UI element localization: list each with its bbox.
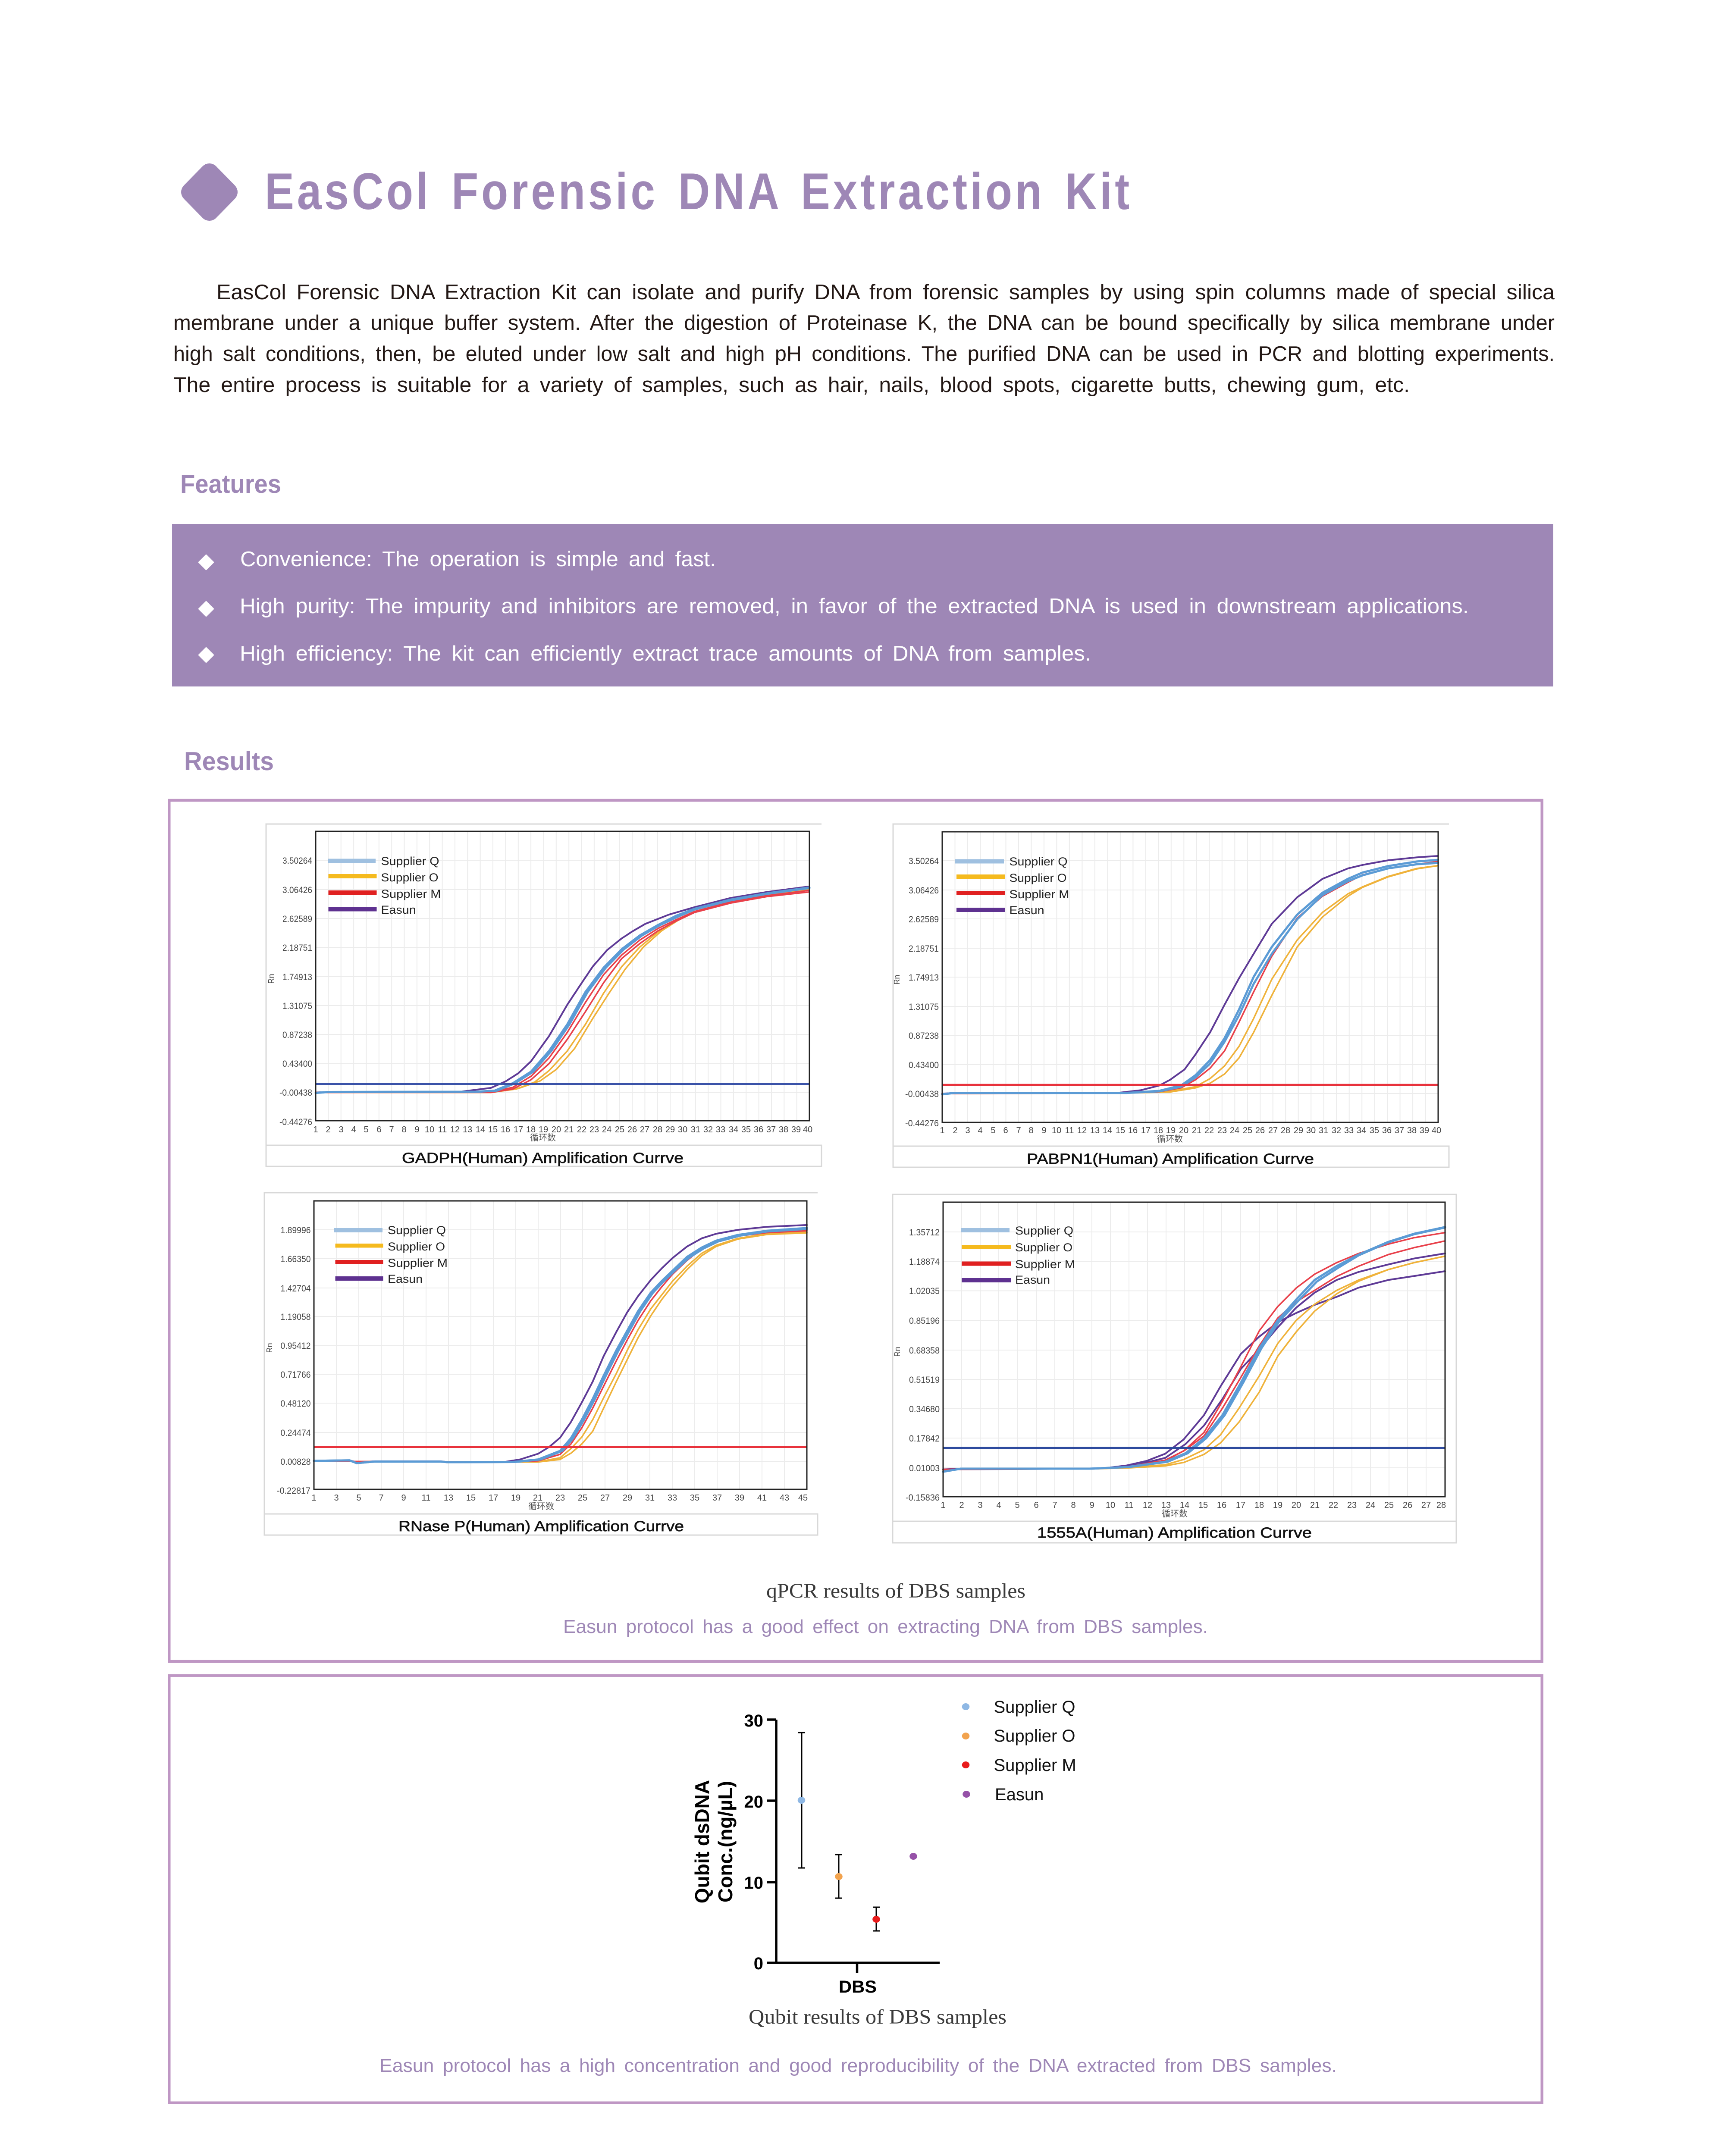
y axis labels: 1.74913 <box>282 972 312 982</box>
y tick labels: 30 <box>744 1711 763 1730</box>
intro paragraph: EasCol Forensic DNA Extraction Kit can isolate and purify DNA from forensic samples by using spin columns made of special silica <box>216 281 1555 304</box>
x axis labels: 25 <box>615 1125 624 1134</box>
x axis labels: 17 <box>1141 1126 1151 1135</box>
x axis labels <box>941 1501 1446 1510</box>
x axis labels: 33 <box>1344 1126 1354 1135</box>
x axis labels: 27 <box>640 1125 649 1134</box>
y axis labels: 1.18874 <box>909 1257 940 1267</box>
x axis labels: 20 <box>1292 1501 1301 1510</box>
x axis labels: 9 <box>414 1125 420 1134</box>
x axis labels: 16 <box>1217 1501 1226 1510</box>
x axis labels: 30 <box>1306 1126 1316 1135</box>
x axis labels: 2 <box>326 1125 331 1134</box>
x axis labels: 28 <box>653 1125 662 1134</box>
x axis labels: 15 <box>466 1493 476 1503</box>
x axis labels: 12 <box>1143 1501 1152 1510</box>
x axis labels: 26 <box>627 1125 637 1134</box>
x axis labels <box>311 1493 808 1503</box>
panel: Qubit results border <box>169 1676 1542 2103</box>
x axis labels: 41 <box>757 1493 767 1503</box>
x axis labels: 23 <box>1217 1126 1227 1135</box>
panel: features list <box>172 524 1553 686</box>
x axis labels: 5 <box>356 1493 361 1503</box>
y axis labels: -0.22817 <box>277 1486 310 1496</box>
caption: PABPN1(Human) Amplification Currve <box>1027 1151 1314 1167</box>
x axis labels: 11 <box>422 1493 430 1503</box>
x axis labels: 11 <box>438 1125 447 1134</box>
y axis labels: -0.44276 <box>279 1117 312 1127</box>
x axis labels: 20 <box>1179 1126 1188 1135</box>
bullet 2 <box>199 602 213 616</box>
x axis labels: 18 <box>1254 1501 1264 1510</box>
legend: Easun <box>388 1272 423 1285</box>
x axis labels: 7 <box>379 1493 384 1503</box>
y axis labels: 1.89996 <box>280 1225 310 1235</box>
caption <box>264 1514 818 1535</box>
x axis labels: 10 <box>1106 1501 1115 1510</box>
error bars <box>798 1733 880 1931</box>
y axis title: Rn <box>265 1343 274 1353</box>
heading: Features: Features <box>180 470 281 498</box>
legend: Supplier O <box>1009 871 1067 884</box>
y axis labels: 2.18751 <box>282 943 312 953</box>
x axis labels: 9 <box>401 1493 406 1503</box>
x axis labels: 19 <box>539 1125 548 1134</box>
y axis labels: 1.66350 <box>280 1254 310 1264</box>
x axis labels: 3 <box>334 1493 339 1503</box>
x axis labels: 3 <box>339 1125 344 1134</box>
x axis labels: 34 <box>729 1125 738 1134</box>
x axis labels: 25 <box>1243 1126 1252 1135</box>
feature: high efficiency: High efficiency: The kit can efficiently extract trace amounts of DNA from samples. <box>240 642 1091 665</box>
legend <box>955 855 1069 917</box>
x axis labels: 21 <box>1192 1126 1201 1135</box>
x axis labels: 10 <box>1052 1126 1061 1135</box>
y axis labels: 2.18751 <box>909 944 939 954</box>
y axis labels: 1.74913 <box>909 973 939 983</box>
x axis labels: 21 <box>533 1493 542 1503</box>
legend: Supplier M <box>1009 888 1069 901</box>
legend: Supplier M <box>994 1756 1076 1775</box>
x axis title: 循环数 <box>1162 1507 1188 1519</box>
x axis labels: 22 <box>577 1125 586 1134</box>
feature: high purity: High purity: The impurity and inhibitors are removed, in favor of the extracted DNA is used in downstream applications. <box>240 595 1469 618</box>
x axis labels: 28 <box>1436 1501 1446 1510</box>
x axis labels: 32 <box>1332 1126 1341 1135</box>
caption <box>893 1521 1456 1543</box>
bullet 3 <box>199 648 213 662</box>
x axis labels: 11 <box>1065 1126 1074 1135</box>
y axis title: Qubit dsDNA <box>691 1780 713 1903</box>
x axis labels: 13 <box>444 1493 453 1503</box>
x axis labels: 29 <box>1294 1126 1303 1135</box>
x axis title: 循环数 <box>1157 1132 1183 1144</box>
caption: qPCR results: qPCR results of DBS samples <box>766 1579 1025 1602</box>
amplification curves <box>943 1227 1445 1472</box>
y axis labels: 0.17842 <box>909 1434 940 1444</box>
legend: Supplier Q <box>388 1224 446 1237</box>
axes <box>767 1720 940 1973</box>
y axis labels: 0.48120 <box>280 1399 310 1409</box>
x axis labels: 27 <box>600 1493 610 1503</box>
x axis labels: 13 <box>1090 1126 1100 1135</box>
x axis labels: 14 <box>1180 1501 1189 1510</box>
x axis title: 循环数 <box>530 1131 556 1143</box>
y axis labels: 1.31075 <box>282 1001 312 1011</box>
x axis labels: 5 <box>991 1126 996 1135</box>
legend: Supplier O <box>388 1240 445 1253</box>
x axis labels: 13 <box>1161 1501 1171 1510</box>
x axis labels: 21 <box>564 1125 574 1134</box>
y axis labels: 0.24474 <box>280 1428 311 1438</box>
x axis labels: 45 <box>798 1493 808 1503</box>
x axis labels: 35 <box>1370 1126 1379 1135</box>
icon: rounded diamond <box>191 173 228 211</box>
y axis labels: -0.00438 <box>279 1088 312 1098</box>
x axis labels: 10 <box>425 1125 434 1134</box>
x axis labels: 23 <box>589 1125 599 1134</box>
y axis labels: 3.50264 <box>909 856 939 866</box>
x axis labels: 37 <box>766 1125 776 1134</box>
y axis labels <box>279 856 312 1127</box>
x axis labels: 8 <box>1071 1501 1076 1510</box>
x axis labels: 16 <box>1128 1126 1138 1135</box>
caption <box>266 1145 822 1166</box>
x axis labels: 12 <box>450 1125 460 1134</box>
x axis labels: 15 <box>1116 1126 1125 1135</box>
panel: qPCR results border <box>169 800 1542 1661</box>
y axis labels <box>277 1225 311 1496</box>
y axis title: Rn <box>893 1347 902 1357</box>
x axis labels: 23 <box>555 1493 565 1503</box>
y axis labels: 0.00828 <box>280 1457 310 1467</box>
x axis labels: 24 <box>1366 1501 1375 1510</box>
y axis labels: 0.34680 <box>909 1404 940 1414</box>
x axis labels: 29 <box>623 1493 632 1503</box>
y tick labels <box>744 1711 763 1973</box>
x axis labels: 38 <box>779 1125 788 1134</box>
x axis labels: 22 <box>1329 1501 1338 1510</box>
x axis labels: 15 <box>488 1125 498 1134</box>
x axis labels: 17 <box>1236 1501 1245 1510</box>
x axis labels: 16 <box>501 1125 510 1134</box>
x axis labels: 22 <box>1204 1126 1214 1135</box>
x axis labels: 2 <box>953 1126 958 1135</box>
heading: Results: Results <box>184 747 274 776</box>
x axis labels: 4 <box>351 1125 356 1134</box>
y axis labels <box>905 856 939 1128</box>
y axis labels: 0.51519 <box>909 1375 940 1385</box>
y axis labels: 0.43400 <box>909 1060 939 1070</box>
x axis labels: 23 <box>1347 1501 1357 1510</box>
y axis labels: 0.95412 <box>280 1341 310 1351</box>
y axis labels: 0.43400 <box>282 1059 312 1069</box>
x axis labels: 26 <box>1403 1501 1412 1510</box>
caption: 1555A(Human) Amplification Currve <box>1037 1525 1312 1541</box>
x axis labels: 43 <box>780 1493 789 1503</box>
x axis labels: 31 <box>691 1125 700 1134</box>
intro paragraph: membrane under a unique buffer system. After the digestion of Proteinase K, the DNA can be bound specifically by silica membrane under <box>173 311 1555 335</box>
x axis labels: 9 <box>1089 1501 1094 1510</box>
chart: RNase P amplification curve <box>264 1193 818 1535</box>
x axis labels: 19 <box>1273 1501 1282 1510</box>
x axis labels: 38 <box>1407 1126 1417 1135</box>
x axis labels: 14 <box>476 1125 485 1134</box>
y axis labels: 0.87238 <box>282 1030 312 1040</box>
x axis labels: 21 <box>1310 1501 1320 1510</box>
y axis labels: 1.19058 <box>280 1312 310 1322</box>
x axis labels: 33 <box>716 1125 725 1134</box>
legend: Easun <box>1015 1273 1050 1286</box>
bullet 1 <box>199 555 213 569</box>
x axis labels: 32 <box>703 1125 713 1134</box>
x axis labels: 1 <box>941 1501 946 1510</box>
y axis labels: 0.71766 <box>280 1370 310 1380</box>
y tick labels: 0 <box>754 1954 763 1973</box>
legend: Supplier M <box>388 1257 448 1269</box>
x axis labels: 40 <box>803 1125 812 1134</box>
x label: DBS <box>839 1977 877 1996</box>
title with diamond icon <box>191 163 1132 220</box>
y axis labels: 3.50264 <box>282 856 312 866</box>
legend: Supplier O <box>994 1727 1075 1745</box>
chart: 1555A amplification curve <box>893 1194 1456 1543</box>
caption: Qubit results: Qubit results of DBS samples <box>749 2006 1007 2028</box>
x axis labels: 39 <box>1420 1126 1429 1135</box>
legend: Supplier O <box>381 871 438 884</box>
amplification curves <box>316 887 809 1093</box>
legend: Supplier Q <box>1009 855 1068 868</box>
intro paragraph <box>173 281 1555 397</box>
amplification curves <box>942 856 1438 1094</box>
data points <box>798 1797 917 1923</box>
x axis labels: 11 <box>1125 1501 1133 1510</box>
x axis labels: 24 <box>602 1125 611 1134</box>
x axis labels: 25 <box>578 1493 587 1503</box>
x axis labels: 6 <box>376 1125 382 1134</box>
x axis labels: 35 <box>690 1493 699 1503</box>
x axis labels: 26 <box>1255 1126 1265 1135</box>
x axis labels: 27 <box>1268 1126 1278 1135</box>
x axis labels: 19 <box>1166 1126 1176 1135</box>
y axis labels: 2.62589 <box>909 915 939 924</box>
x axis labels: 40 <box>1432 1126 1441 1135</box>
x axis labels: 29 <box>665 1125 675 1134</box>
x axis labels: 31 <box>645 1493 655 1503</box>
x axis labels: 3 <box>978 1501 983 1510</box>
x axis labels: 15 <box>1198 1501 1208 1510</box>
x axis labels: 6 <box>1003 1126 1008 1135</box>
y axis title <box>691 1780 737 1903</box>
y axis labels: -0.15836 <box>906 1493 940 1503</box>
y axis labels: 0.68358 <box>909 1346 940 1356</box>
feature: convenience: Convenience: The operation is simple and fast. <box>240 548 716 571</box>
x axis labels: 14 <box>1103 1126 1112 1135</box>
y axis labels: 0.01003 <box>909 1463 940 1473</box>
x axis labels: 7 <box>389 1125 394 1134</box>
y axis labels: 1.35712 <box>909 1228 940 1238</box>
y axis labels: 1.42704 <box>280 1284 311 1294</box>
x axis labels: 5 <box>1015 1501 1020 1510</box>
x axis labels: 35 <box>741 1125 751 1134</box>
legend: Easun <box>1009 904 1044 917</box>
y axis labels: 0.87238 <box>909 1031 939 1041</box>
y axis title: Rn <box>267 974 276 984</box>
x axis labels: 27 <box>1421 1501 1431 1510</box>
x axis labels: 24 <box>1230 1126 1239 1135</box>
y axis labels <box>906 1228 940 1503</box>
chart: Qubit concentration scatter <box>691 1698 1076 1996</box>
legend: Supplier Q <box>994 1698 1075 1717</box>
x axis labels: 19 <box>511 1493 520 1503</box>
x axis labels: 8 <box>401 1125 407 1134</box>
x axis labels: 5 <box>364 1125 369 1134</box>
x axis labels: 18 <box>1154 1126 1163 1135</box>
x axis labels: 13 <box>463 1125 472 1134</box>
intro paragraph: The entire process is suitable for a variety of samples, such as hair, nails, blood spots, cigarette butts, chewing gum, etc. <box>173 373 1410 397</box>
y axis labels: 3.06426 <box>909 886 939 896</box>
x axis labels: 39 <box>735 1493 744 1503</box>
legend <box>334 1224 448 1285</box>
chart: PABPN1 amplification curve <box>893 824 1449 1167</box>
legend: Easun <box>381 903 416 916</box>
y axis labels: 2.62589 <box>282 914 312 924</box>
x axis title: 循环数 <box>528 1499 554 1512</box>
x axis labels: 31 <box>1319 1126 1328 1135</box>
legend <box>962 1698 1076 1804</box>
x axis labels: 34 <box>1357 1126 1366 1135</box>
x axis labels: 39 <box>791 1125 801 1134</box>
x axis labels: 1 <box>940 1126 945 1135</box>
x axis labels: 9 <box>1041 1126 1047 1135</box>
caption: RNase P(Human) Amplification Currve <box>398 1518 684 1535</box>
y axis labels: -0.44276 <box>905 1119 939 1128</box>
x axis labels: 17 <box>489 1493 498 1503</box>
x axis labels: 33 <box>668 1493 677 1503</box>
x axis labels: 7 <box>1052 1501 1057 1510</box>
chart: GADPH amplification curve <box>266 824 822 1166</box>
intro paragraph: high salt conditions, then, be eluted under low salt and high pH conditions. The purified DNA can be used in PCR and blotting experiments. <box>173 342 1555 366</box>
note: qPCR conclusion: Easun protocol has a good effect on extracting DNA from DBS samples. <box>563 1616 1208 1637</box>
x axis labels: 36 <box>1382 1126 1392 1135</box>
amplification curves <box>314 1225 807 1463</box>
title text: EasCol Forensic DNA Extraction Kit <box>265 163 1132 220</box>
x axis labels <box>940 1126 1441 1135</box>
x axis labels: 1 <box>313 1125 318 1134</box>
x axis labels: 17 <box>514 1125 523 1134</box>
x axis labels <box>313 1125 812 1134</box>
y axis labels: -0.00438 <box>905 1089 939 1099</box>
x axis labels: 20 <box>552 1125 561 1134</box>
x axis labels: 25 <box>1384 1501 1394 1510</box>
x axis labels: 36 <box>754 1125 763 1134</box>
x axis labels: 7 <box>1016 1126 1021 1135</box>
x axis labels: 1 <box>311 1493 317 1503</box>
legend: Supplier Q <box>381 855 439 868</box>
x axis labels: 37 <box>712 1493 722 1503</box>
y axis labels: 1.31075 <box>909 1002 939 1012</box>
legend: Supplier M <box>1015 1258 1075 1271</box>
y axis title: Rn <box>893 975 901 985</box>
x axis labels: 12 <box>1077 1126 1087 1135</box>
y axis labels: 1.02035 <box>909 1286 940 1296</box>
x axis labels: 2 <box>959 1501 964 1510</box>
legend <box>328 855 441 916</box>
legend: Supplier O <box>1015 1241 1072 1254</box>
y tick labels: 10 <box>744 1874 763 1893</box>
x axis labels: 30 <box>678 1125 687 1134</box>
x axis labels: 18 <box>526 1125 536 1134</box>
x axis labels: 37 <box>1395 1126 1404 1135</box>
note: Qubit conclusion: Easun protocol has a high concentration and good reproducibility of the DNA extracted from DBS samples. <box>379 2055 1337 2076</box>
x axis labels: 4 <box>978 1126 983 1135</box>
caption <box>893 1146 1449 1167</box>
y axis labels: 0.85196 <box>909 1316 940 1326</box>
x axis labels: 4 <box>996 1501 1001 1510</box>
legend: Supplier Q <box>1015 1224 1073 1237</box>
x axis labels: 8 <box>1028 1126 1034 1135</box>
x axis labels: 28 <box>1281 1126 1290 1135</box>
legend <box>961 1224 1075 1286</box>
legend: Easun <box>995 1785 1044 1804</box>
y axis labels: 3.06426 <box>282 885 312 895</box>
legend: Supplier M <box>381 887 441 900</box>
y tick labels: 20 <box>744 1792 763 1811</box>
x axis labels: 6 <box>1034 1501 1039 1510</box>
caption: GADPH(Human) Amplification Currve <box>402 1150 684 1166</box>
x axis labels: 3 <box>965 1126 970 1135</box>
y axis title: Conc.(ng/µL) <box>714 1781 737 1902</box>
